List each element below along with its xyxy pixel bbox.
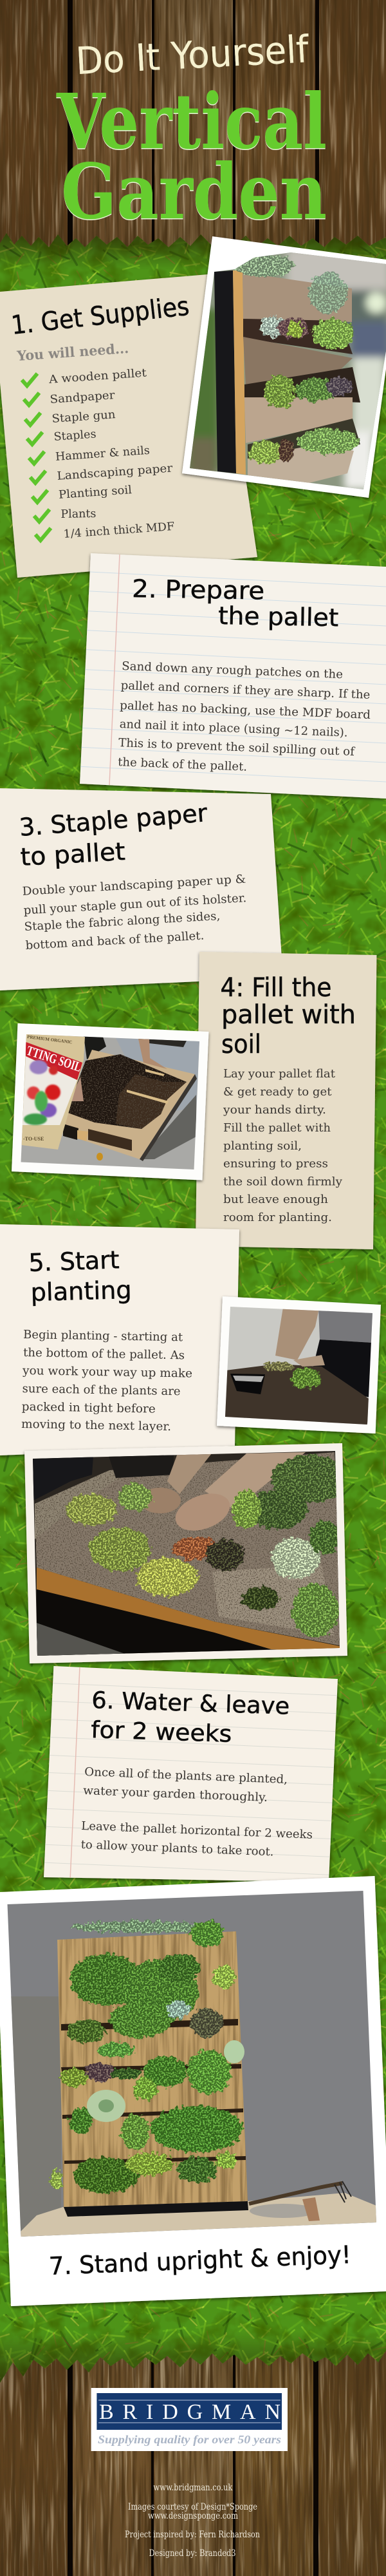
body text: Leave the pallet horizontal for 2 weeks	[81, 1819, 313, 1842]
lined paper sheet	[44, 1666, 338, 1882]
paper sheet	[0, 788, 283, 990]
body text: Sand down any rough patches on the	[122, 659, 343, 681]
title line: garden: Garden	[61, 147, 327, 236]
panel: step 3 staple paper to pallet	[0, 788, 283, 990]
body text: Fill the pallet with	[223, 1121, 331, 1135]
designer credit: Designed by: Branded3	[149, 2548, 235, 2559]
checklist item: A wooden pallet	[48, 366, 147, 386]
title: Vertical	[56, 77, 327, 167]
photo: planting into soil	[217, 1296, 381, 1434]
image credit link: www.designsponge.com	[148, 2511, 238, 2521]
photo image	[29, 1449, 349, 1658]
body text: the back of the pallet.	[118, 755, 247, 774]
heading: 4: Fill the	[220, 973, 332, 1003]
checklist item: Sandpaper	[50, 389, 116, 406]
succulent rosette	[87, 2090, 125, 2122]
panel: step 7 stand upright and enjoy	[0, 1876, 386, 2306]
body text: packed in tight before	[22, 1400, 156, 1416]
lined paper sheet	[80, 553, 386, 799]
photo image	[180, 248, 386, 493]
checklist item: Staples	[53, 428, 96, 444]
body text: the bottom of the pallet. As	[23, 1346, 185, 1362]
logo wordmark: BRIDGMAN	[99, 2400, 280, 2424]
photo: soil bag and pallet	[12, 1023, 208, 1180]
body text: Double your landscaping paper up &	[22, 873, 246, 898]
image credit: Images courtesy of Design*Sponge	[128, 2502, 257, 2512]
body text: Lay your pallet flat	[223, 1067, 336, 1081]
photo image	[222, 1304, 376, 1426]
photo frame	[182, 236, 386, 498]
heading line 3: soil	[221, 1030, 261, 1059]
photo frame	[217, 1296, 381, 1434]
panel: step 4 fill the pallet with soil	[196, 952, 377, 1249]
body text: Begin planting - starting at	[23, 1328, 183, 1344]
checklist item: Planting soil	[58, 484, 133, 502]
body text: you work your way up make	[22, 1364, 192, 1381]
paper sheet	[196, 952, 377, 1249]
body text: ensuring to press	[223, 1157, 328, 1171]
heading: 5. Start	[28, 1245, 120, 1277]
body text	[21, 1328, 192, 1434]
background: wooden fence bottom	[0, 2344, 386, 2576]
title: Garden	[61, 148, 327, 237]
title line: do it yourself: Do It Yourself	[75, 27, 311, 83]
body text: and nail it into place (using ~12 nails).	[119, 717, 348, 740]
heading: 3. Staple paper	[18, 799, 208, 842]
body text: pallet has no backing, use the MDF board	[120, 699, 371, 722]
body text: Once all of the plants are planted,	[84, 1765, 288, 1786]
body text: planting soil,	[223, 1139, 302, 1153]
heading line 2: to pallet	[20, 837, 126, 871]
panel: step 2 prepare the pallet	[77, 553, 386, 799]
ruled lines	[42, 1667, 341, 1880]
body text	[80, 1765, 313, 1859]
body text: room for planting.	[223, 1211, 332, 1224]
panel: step 5 start planting	[0, 1224, 239, 1455]
bag usage text: -TO-USE	[23, 1136, 44, 1142]
body text	[223, 1067, 343, 1224]
icons: green check marks	[22, 374, 51, 540]
photo: finished pallet side view	[180, 236, 386, 498]
body text: but leave enough	[223, 1193, 328, 1206]
photo frame	[12, 1023, 208, 1180]
body text: moving to the next layer.	[21, 1417, 171, 1434]
background: wooden fence top	[0, 0, 386, 270]
body text: pallet and corners if they are sharp. If the	[120, 679, 371, 702]
heading: 1. Get Supplies	[10, 292, 190, 341]
body text: bottom and back of the pallet.	[25, 929, 205, 952]
subheading: You will need...	[16, 340, 129, 364]
logo tagline: Supplying quality for over 50 years	[98, 2433, 281, 2446]
title	[56, 27, 327, 237]
caption: 7. Stand upright & enjoy!	[48, 2240, 351, 2280]
body text: Staple the fabric along the sides,	[24, 909, 221, 934]
title line: vertical: Vertical	[56, 77, 327, 166]
body text: water your garden thoroughly.	[83, 1784, 268, 1804]
heading line 2: for 2 weeks	[91, 1717, 232, 1748]
logo plate	[91, 2388, 288, 2451]
polaroid frame	[0, 1876, 386, 2306]
heading line 2: the pallet	[218, 601, 339, 632]
website link: www.bridgman.co.uk	[153, 2483, 233, 2493]
paper sheet	[0, 1224, 239, 1455]
checklist item: Plants	[60, 507, 96, 521]
footer credits	[125, 2483, 260, 2559]
paper sheet	[0, 274, 257, 578]
body text	[22, 873, 247, 952]
ruled lines	[77, 554, 386, 785]
body text: & get ready to get	[223, 1085, 332, 1099]
bag small text: PREMIUM ORGANIC	[27, 1034, 73, 1045]
checklist	[48, 366, 175, 541]
heading line 2: planting	[30, 1276, 132, 1307]
body text: the soil down firmly	[223, 1175, 343, 1189]
checklist item: 1/4 inch thick MDF	[63, 520, 175, 541]
project credit: Project inspired by: Fern Richardson	[125, 2530, 260, 2540]
checklist item: Staple gun	[51, 408, 116, 426]
heading line 2: pallet with	[221, 1000, 356, 1030]
garden tools	[249, 2181, 351, 2221]
logo: bridgman	[91, 2388, 288, 2451]
checklist item: Landscaping paper	[57, 462, 174, 483]
body text: pull your staple gun out of its holster.	[23, 891, 247, 917]
photo: hands planting succulents	[24, 1443, 349, 1663]
body text	[118, 659, 371, 774]
panel: step 1 get supplies	[0, 274, 257, 578]
heading: 2. Prepare	[132, 574, 265, 605]
checklist item: Hammer & nails	[55, 444, 151, 464]
photo: finished vertical garden	[3, 1887, 383, 2241]
panel: step 6 water and leave for 2 weeks	[42, 1666, 341, 1882]
photo frame	[24, 1443, 347, 1663]
body text: This is to prevent the soil spilling out of	[118, 736, 356, 759]
logo navy band	[96, 2393, 282, 2430]
heading: 6. Water & leave	[91, 1687, 290, 1720]
body text: your hands dirty.	[223, 1103, 326, 1117]
body text: sure each of the plants are	[22, 1382, 181, 1398]
body text: to allow your plants to take root.	[80, 1838, 274, 1859]
bag label text: TTING SOIL	[24, 1043, 84, 1075]
photo image	[21, 1034, 199, 1170]
